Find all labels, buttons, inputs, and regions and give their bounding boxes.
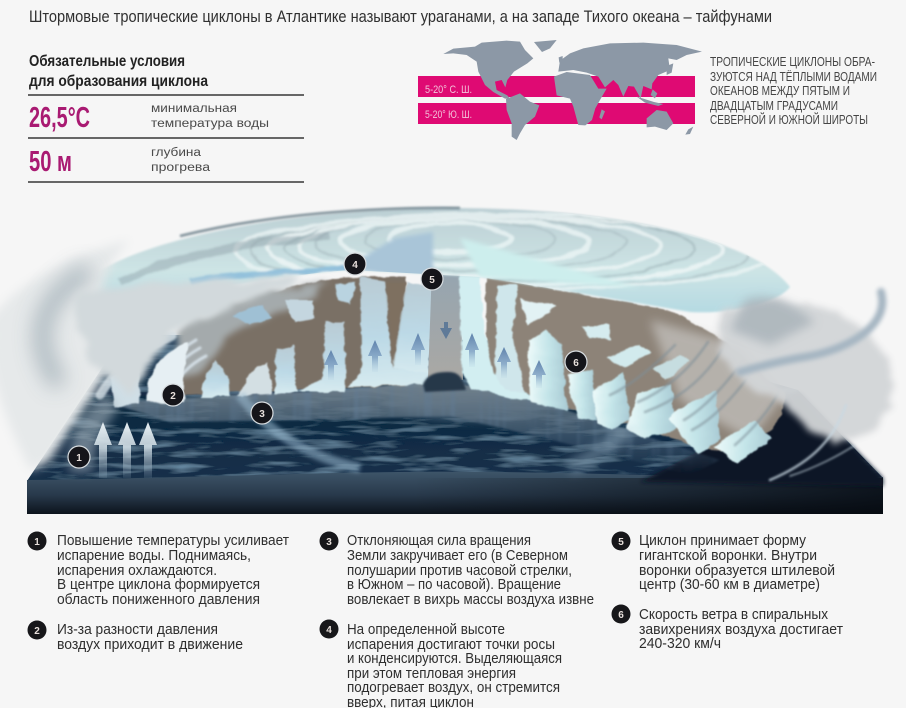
marker 1: 1 xyxy=(76,453,82,464)
legend item 2 xyxy=(28,620,243,653)
legend item 3 xyxy=(320,532,594,608)
eye floor opening xyxy=(423,372,466,392)
stat: depth label: глубина xyxy=(151,147,202,159)
legend item 3: в Южном – по часовой). Вращение xyxy=(347,576,561,593)
marker 5 xyxy=(421,268,443,290)
legend item 5 xyxy=(612,532,835,593)
legend item 5: Циклон принимает форму xyxy=(639,532,806,549)
grey cloud tint: right xyxy=(650,320,785,440)
brown inner cloud mass: left xyxy=(180,276,405,395)
legend item 5: 5 xyxy=(618,537,624,548)
heading: conditions: для образования циклона xyxy=(29,73,208,90)
stat: depth label xyxy=(151,147,211,174)
legend item 1: испарения охлаждаются. xyxy=(57,562,217,579)
legend item 3: Земли закручивает его (в Северном xyxy=(347,547,568,564)
panel: world map with latitude bands xyxy=(418,40,702,140)
foreground haze: right xyxy=(720,301,893,445)
band label: north: 5-20° С. Ш. xyxy=(425,84,472,96)
dome: cloud top xyxy=(80,208,790,312)
legend item 4 xyxy=(320,620,562,708)
legend item 1: 1 xyxy=(34,537,40,548)
legend item 6: 240-320 км/ч xyxy=(639,635,721,652)
dome: blue underside xyxy=(362,232,435,274)
illustration: cyclone cross-section xyxy=(0,208,893,514)
foreground haze: left xyxy=(0,240,135,470)
blue arrows: rising air xyxy=(324,333,546,388)
marker 4 xyxy=(344,253,366,275)
cloud columns: left side xyxy=(110,277,437,407)
band: south xyxy=(418,103,695,124)
marker 3: 3 xyxy=(259,409,265,420)
marker 5: 5 xyxy=(429,275,435,286)
stat: temperature label xyxy=(151,103,269,130)
stat: depth value: 50 м xyxy=(29,146,72,178)
cloud columns: right side xyxy=(458,240,772,464)
brown inner cloud mass: right xyxy=(486,277,785,452)
haze band: under dome xyxy=(75,278,300,395)
dome: pale right underside xyxy=(462,239,626,286)
legend item 4: и конденсируются. Выделяющаяся xyxy=(347,650,562,667)
legend item 6: Скорость ветра в спиральных xyxy=(639,606,828,623)
marker 1 xyxy=(68,446,90,468)
eye floor xyxy=(390,384,550,420)
text block: where cyclones form xyxy=(710,54,877,127)
marker 2: 2 xyxy=(170,391,176,402)
brown spike between columns xyxy=(386,282,406,366)
legend item 4: подогревает воздух, он стремится xyxy=(347,679,560,696)
legend item 5: воронки образуется штилевой xyxy=(639,562,835,579)
legend item 5: центр (30-60 км в диаметре) xyxy=(639,576,820,593)
eye top ring xyxy=(426,226,464,240)
legend item 3: 3 xyxy=(326,537,332,548)
marker 6 xyxy=(565,351,587,373)
legend item 6: 6 xyxy=(618,610,624,621)
legend item 1 xyxy=(28,532,289,608)
legend item 1: Повышение температуры усиливает xyxy=(57,532,289,549)
legend item 6 xyxy=(612,604,843,652)
legend item 1: В центре циклона формируется xyxy=(57,576,260,593)
legend item 2: воздух приходит в движение xyxy=(57,636,243,653)
haze swirl: right xyxy=(740,292,882,372)
legend item 4: испарения достигают точки росы xyxy=(347,636,555,653)
legend item 6: завихрениях воздуха достигает xyxy=(639,621,843,638)
band: north xyxy=(418,76,695,97)
legend item 1: испарение воды. Поднимаясь, xyxy=(57,547,251,564)
marker 3 xyxy=(251,402,273,424)
legend item 2: Из-за разности давления xyxy=(57,621,218,638)
dark water right xyxy=(640,392,883,486)
marker 4: 4 xyxy=(352,260,358,271)
title: Штормовые тропические циклоны в Атлантике называют ураганами, а на западе Тихого океана – тайфунами xyxy=(29,7,772,26)
grey cloud mass: left edge xyxy=(170,282,330,380)
ocean block xyxy=(27,335,883,514)
dome: swirl rings xyxy=(120,214,775,290)
heading: conditions: Обязательные условия xyxy=(29,53,185,70)
white arrows: evaporation xyxy=(94,422,157,478)
marker 6: 6 xyxy=(573,358,579,369)
stat: temperature value: 26,5°C xyxy=(29,102,90,134)
legend item 3: Отклоняющая сила вращения xyxy=(347,532,531,549)
stat: depth label: прогрева xyxy=(151,162,211,174)
legend item 3: полушарии против часовой стрелки, xyxy=(347,562,572,579)
legend item 4: при этом тепловая энергия xyxy=(347,665,516,682)
legend item 4: На определенной высоте xyxy=(347,621,505,638)
map: continents xyxy=(443,40,702,140)
stat: temperature label: минимальная xyxy=(151,103,237,115)
floor swirl band xyxy=(240,395,628,468)
marker 2 xyxy=(162,384,184,406)
band label: south: 5-20° Ю. Ш. xyxy=(425,109,472,121)
legend item 1: область пониженного давления xyxy=(57,591,260,608)
ocean front face xyxy=(27,472,883,514)
back-left corner swirl xyxy=(100,336,206,395)
legend item 2: 2 xyxy=(34,626,40,637)
front face shade xyxy=(27,478,883,514)
panel: required conditions xyxy=(28,53,304,183)
foam streaks xyxy=(770,405,855,480)
heading: conditions xyxy=(29,53,208,90)
ocean surface xyxy=(27,335,883,484)
foreground mist column xyxy=(69,392,118,472)
stat: temperature label: температура воды xyxy=(151,118,269,130)
blue arrow: descending air xyxy=(440,322,452,339)
cloud shading: right stripes xyxy=(610,342,780,445)
legend item 4: 4 xyxy=(326,625,332,636)
inner cloud wall base xyxy=(110,380,720,475)
haze shade: upper right xyxy=(730,297,815,345)
eye column xyxy=(428,238,463,380)
dome: dark rim xyxy=(180,208,460,236)
legend item 5: гигантской воронки. Внутри xyxy=(639,547,817,564)
text block: where cyclones form: ДВАДЦАТЫМ ГРАДУСАМИ xyxy=(710,98,838,113)
text block: where cyclones form: ОКЕАНОВ МЕЖДУ ПЯТЫМ И xyxy=(710,83,850,98)
legend item 3: вовлекает в вихрь массы воздуха извне xyxy=(347,591,594,608)
haze band: left grey xyxy=(42,270,90,385)
